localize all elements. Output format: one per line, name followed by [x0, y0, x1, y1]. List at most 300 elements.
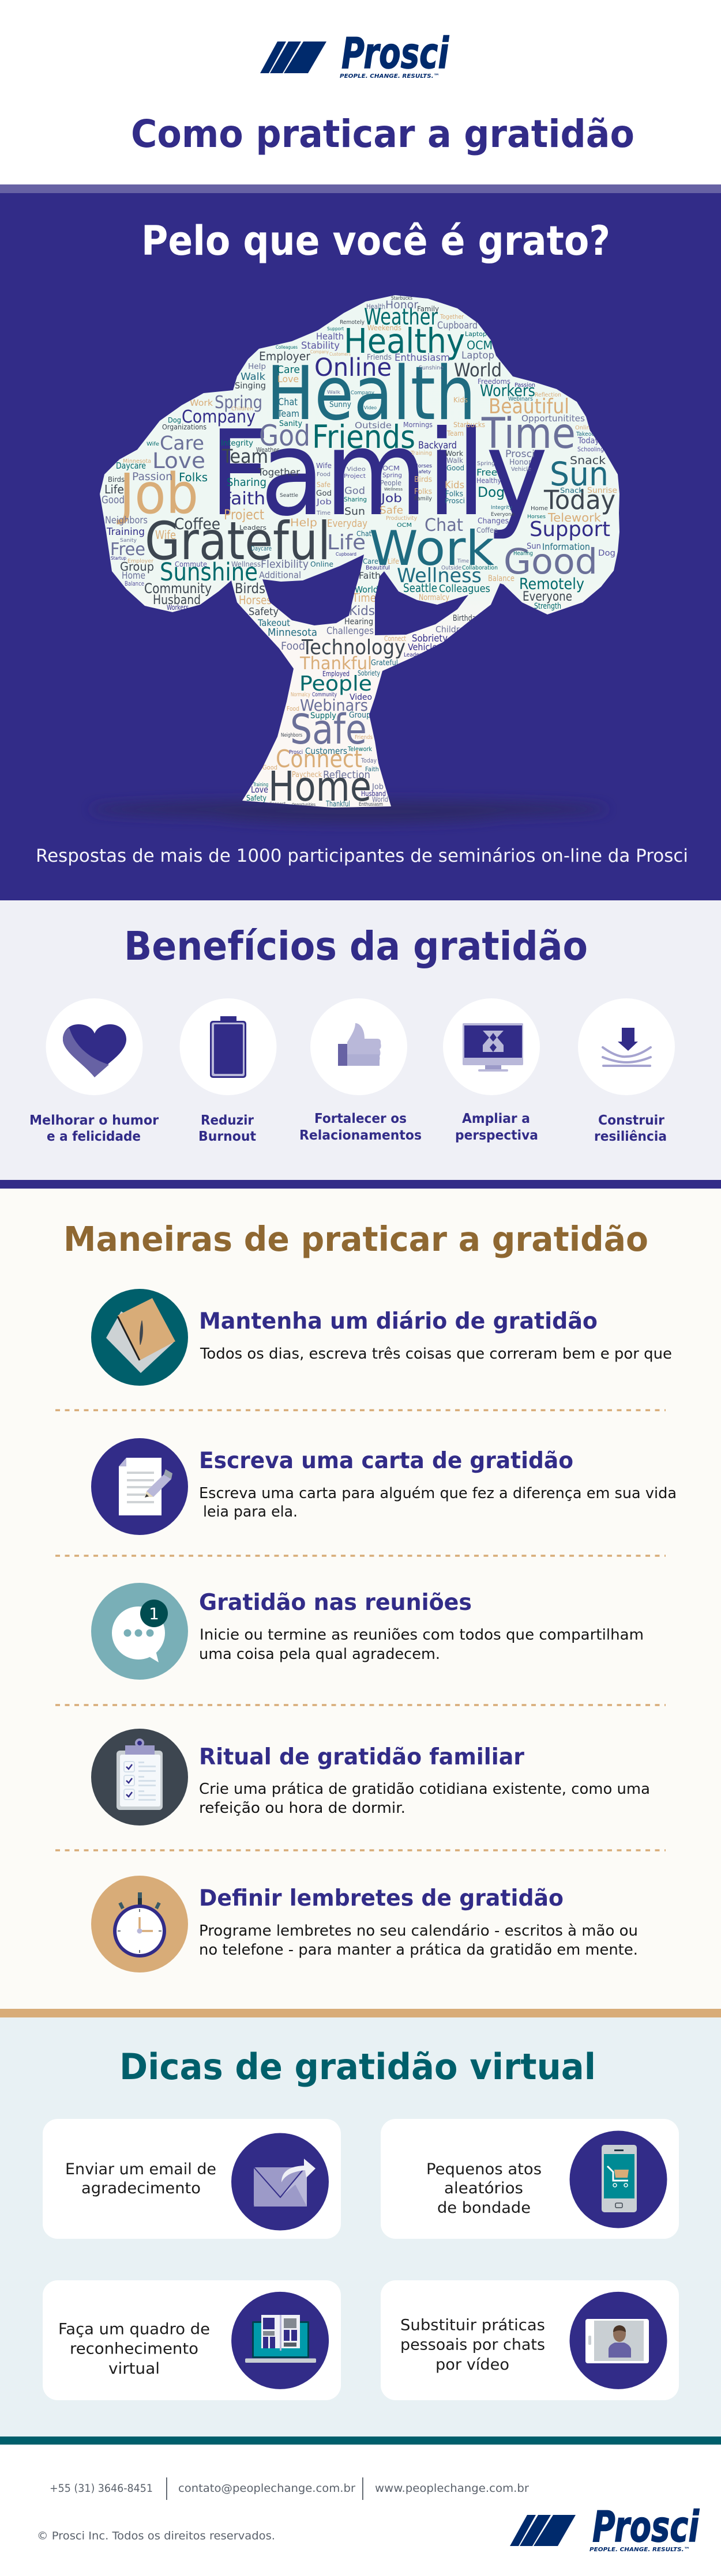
word cloud tree: Cupboard: [336, 552, 356, 557]
word cloud tree: Supply: [310, 711, 336, 721]
word cloud tree: Care: [363, 557, 378, 565]
word cloud tree: Snack: [570, 454, 606, 467]
word cloud tree: Free: [476, 467, 497, 478]
word cloud tree: Wellness: [231, 560, 261, 568]
word cloud tree: World: [355, 584, 378, 595]
word cloud tree: Flexibility: [261, 558, 309, 571]
word cloud tree: Everyone: [491, 512, 515, 518]
word cloud tree: Healthy: [476, 477, 501, 485]
word cloud tree: Leaders: [404, 652, 424, 658]
word cloud tree: Family: [417, 305, 439, 313]
word cloud tree: Sunrise: [587, 486, 617, 495]
word cloud tree: Beautiful: [366, 565, 390, 571]
item: family ritual: refeição ou hora de dormir.: [199, 1800, 405, 1817]
word cloud tree: Grateful: [371, 659, 398, 667]
word cloud tree: Neighbors: [105, 515, 148, 526]
word cloud tree: Home: [531, 506, 548, 512]
word cloud tree: Wife: [155, 528, 176, 542]
word cloud tree: Vehicle: [408, 642, 437, 653]
word cloud tree: Home: [268, 763, 371, 810]
card: recognition board: reconhecimento: [70, 2340, 198, 2358]
card: acts of kindness: de bondade: [437, 2199, 531, 2217]
benefit: relationships: Relacionamentos: [299, 1127, 422, 1143]
word cloud tree: Today: [543, 485, 615, 515]
word cloud tree: Company: [351, 390, 375, 396]
label: Ampliar a: [462, 1110, 530, 1126]
word cloud tree: Paycheck: [292, 771, 322, 779]
word cloud tree: Wife: [147, 442, 159, 447]
word cloud tree: Help: [248, 363, 266, 371]
word cloud tree: Kids: [453, 396, 468, 404]
word cloud tree: Honor: [385, 299, 418, 311]
icon: down arrow over layers: [602, 1028, 651, 1067]
title: Como praticar a gratidão: [131, 112, 634, 156]
word cloud tree: Husband: [153, 593, 201, 608]
item: letter: leia para ela.: [203, 1503, 298, 1521]
word cloud tree: Strength: [534, 602, 561, 611]
word cloud tree: Time: [352, 591, 376, 605]
word cloud tree: Honor: [509, 458, 532, 467]
word cloud tree: Birds: [414, 476, 432, 484]
word cloud tree: Weather: [256, 446, 279, 454]
footer logo: PEOPLE. CHANGE. RESULTS.™: [589, 2547, 690, 2553]
top accent bar: [0, 184, 721, 193]
word cloud tree: Team: [446, 429, 464, 437]
word cloud tree: Walk: [327, 390, 340, 395]
word cloud tree: Passion: [515, 382, 535, 389]
word cloud tree: Time: [316, 510, 331, 516]
footer contact line: +55 (31) 3646-8451: [50, 2483, 153, 2495]
word cloud tree: Changes: [478, 517, 509, 526]
word cloud tree: Everyone: [523, 590, 572, 604]
word cloud tree: Walk: [446, 457, 463, 465]
word cloud tree: Challenges: [326, 625, 374, 637]
word cloud tree: Care: [277, 364, 300, 376]
card: thank-you email: Enviar um email de: [65, 2160, 216, 2178]
word cloud tree: Outside: [441, 565, 461, 571]
word cloud tree: Reflection: [535, 392, 561, 398]
word cloud tree: Work: [445, 450, 463, 458]
word cloud tree: Stability: [301, 340, 340, 352]
word cloud tree: Good: [262, 764, 277, 771]
word cloud tree: Collaboration: [462, 565, 498, 571]
word cloud tree: Connect: [384, 635, 406, 643]
heading: Gratidão nas reuniões: [199, 1590, 472, 1616]
word cloud tree: Team: [221, 445, 268, 467]
description: Todos os dias, escreva três coisas que correram bem e por que: [200, 1345, 672, 1363]
word cloud tree: Faith: [365, 765, 379, 773]
word cloud tree: Freedoms: [478, 378, 510, 386]
word cloud tree: Today: [360, 757, 377, 764]
word cloud tree: Productivity: [386, 515, 417, 522]
word cloud tree: Online: [314, 353, 392, 382]
word cloud tree: Husband: [361, 790, 386, 798]
word cloud tree: Time: [457, 559, 469, 564]
word cloud tree: Starbucks: [391, 296, 412, 301]
word cloud tree: Customers: [305, 746, 347, 756]
word cloud tree: Connect: [269, 801, 286, 806]
word cloud tree: OCM: [397, 522, 412, 529]
word cloud tree: Life: [388, 557, 399, 565]
word cloud tree: Thankful: [299, 654, 372, 674]
description: Escreva uma carta para alguém que fez a diferença em sua vida: [199, 1485, 677, 1502]
word cloud tree: Horses: [414, 463, 432, 469]
word cloud tree: Startup: [111, 556, 126, 561]
word cloud tree: Sobriety: [412, 633, 448, 644]
word cloud tree: Good: [102, 494, 125, 506]
word cloud tree: Employed: [322, 670, 350, 678]
word cloud tree: Spring: [477, 461, 495, 467]
footer copyright: © Prosci Inc. Todos os direitos reservados.: [37, 2530, 275, 2542]
word cloud tree: Coffee: [174, 515, 220, 533]
heading: Escreva uma carta de gratidão: [199, 1448, 573, 1474]
word cloud tree: Sun: [344, 506, 365, 518]
top logo: PEOPLE. CHANGE. RESULTS.™: [340, 73, 440, 80]
benefit: resilience: resiliência: [594, 1128, 667, 1144]
word cloud tree: God: [259, 419, 310, 452]
word cloud tree: Birds: [108, 476, 125, 484]
word cloud tree: Horses: [239, 593, 272, 607]
word cloud tree: Employer: [259, 349, 311, 363]
word cloud tree: Dog: [598, 549, 615, 558]
word cloud tree: Job: [117, 462, 198, 526]
item: reminders: no telefone - para manter a prática da gratidão em mente.: [199, 1941, 638, 1959]
word cloud tree: Job: [316, 498, 332, 507]
word cloud tree: Community: [312, 692, 337, 698]
word cloud tree: Backyard: [418, 440, 457, 451]
word cloud tree: Training: [410, 450, 432, 457]
card: video chats: pessoais por chats: [400, 2336, 545, 2354]
word cloud tree: Food: [287, 705, 299, 712]
heading: Definir lembretes de gratidão: [199, 1885, 564, 1911]
item: reminders: [91, 1876, 638, 1972]
word cloud tree: Faith: [359, 570, 381, 581]
word cloud tree: Normalcy: [419, 593, 449, 602]
word cloud tree: Online: [575, 425, 594, 431]
word cloud tree: Telework: [347, 745, 373, 753]
word cloud tree: Friends: [355, 734, 373, 741]
word cloud tree: Chat: [425, 515, 463, 535]
word cloud tree: Sharing: [344, 496, 367, 503]
word cloud tree: Sobriety: [358, 669, 380, 677]
word cloud tree: Coffee: [476, 526, 498, 534]
word cloud tree: Telework: [547, 511, 601, 525]
word cloud tree: Project: [344, 473, 366, 480]
footer contact line: www.peoplechange.com.br: [375, 2483, 529, 2495]
benefit: perspective: perspectiva: [455, 1127, 538, 1143]
card: video chats: Substituir práticas: [400, 2316, 545, 2334]
word cloud tree: Connect: [276, 745, 362, 773]
word cloud tree: Seattle: [280, 493, 298, 499]
word cloud tree: Leaders: [239, 524, 266, 531]
word cloud tree: Dog: [168, 416, 181, 424]
word cloud tree: Online: [310, 560, 333, 568]
panel: benefits: [0, 900, 721, 1180]
word cloud tree: Sun: [527, 542, 541, 551]
word cloud tree: Colleagues: [439, 583, 490, 595]
word cloud tree: Dog: [478, 484, 505, 500]
item: letter: [91, 1438, 677, 1535]
word cloud tree: Neighbors: [281, 733, 302, 738]
word cloud tree: Sunshine: [419, 365, 444, 371]
word cloud tree: Good: [446, 464, 464, 472]
word cloud tree: Friends: [367, 353, 392, 362]
word cloud tree: Webinars: [300, 696, 368, 715]
description: Inicie ou termine as reuniões com todos que compartilham: [200, 1627, 644, 1644]
word cloud tree: Balance: [488, 574, 515, 583]
word cloud tree: Company: [182, 407, 256, 427]
icon: chat bubble: 1: [149, 1604, 159, 1623]
word cloud tree: Friends: [312, 418, 415, 455]
benefit: burnout: Burnout: [198, 1128, 256, 1144]
word cloud tree: Opportunitites: [521, 413, 585, 424]
word cloud tree: Company: [310, 349, 329, 354]
panel: virtual tips: [0, 2017, 721, 2437]
word cloud tree: Mornings: [403, 421, 433, 429]
word cloud tree: Information: [542, 541, 590, 552]
benefit: mood: [29, 998, 159, 1144]
word cloud tree: Team: [277, 408, 299, 419]
word cloud tree: Health: [316, 331, 344, 342]
word cloud tree: Help: [290, 516, 317, 529]
footer contact line: [50, 2477, 529, 2500]
word cloud tree: Group: [120, 560, 154, 574]
word cloud tree: Remotely: [519, 575, 584, 593]
label: Melhorar o humor: [29, 1112, 159, 1128]
label: Construir: [598, 1112, 664, 1128]
word cloud tree: Employer: [127, 559, 153, 564]
word cloud tree: Minnesota: [268, 627, 317, 639]
footer logo: [510, 2502, 700, 2553]
label: Reduzir: [201, 1112, 254, 1128]
word cloud tree: Home: [122, 570, 145, 582]
word cloud tree: Beautiful: [489, 395, 569, 418]
word cloud tree: OCM: [382, 465, 400, 472]
word cloud tree: Community: [144, 580, 212, 597]
word cloud tree: Training: [253, 782, 268, 788]
word cloud tree: Care: [160, 432, 204, 454]
benefit: burnout: [180, 998, 277, 1144]
word cloud tree: Work: [190, 398, 213, 408]
word cloud tree: Hearing: [513, 550, 533, 557]
word cloud tree: Time: [481, 409, 576, 458]
word cloud tree: Birthday: [453, 614, 480, 623]
word cloud tree: Integrity: [491, 505, 513, 511]
panel: ways to practice: [0, 1189, 721, 2009]
word cloud tree: Spring: [215, 393, 262, 413]
hero caption: Respostas de mais de 1000 participantes de seminários on-line da Prosci: [36, 846, 688, 866]
word cloud tree: Workers: [480, 381, 535, 400]
word cloud tree: [92, 288, 629, 813]
word cloud tree: Sanity: [120, 538, 137, 544]
word cloud tree: Singing: [235, 380, 266, 391]
word cloud tree: Safe: [317, 481, 331, 489]
panel: word cloud hero: [0, 193, 721, 900]
word cloud tree: Love: [152, 448, 205, 473]
word cloud tree: Wellness: [384, 487, 403, 492]
word cloud tree: Folks: [179, 470, 208, 484]
word cloud tree: Passion: [132, 470, 172, 483]
word cloud tree: Sunshine: [160, 558, 258, 587]
word cloud tree: Health: [366, 303, 385, 311]
icon: envelope: [231, 2133, 329, 2231]
word cloud tree: Daycare: [251, 545, 272, 552]
word cloud tree: Together: [257, 467, 300, 478]
word cloud tree: Faith: [222, 489, 265, 509]
word cloud tree: Starbucks: [453, 421, 485, 429]
word cloud tree: People: [380, 479, 401, 487]
word cloud tree: Kids: [445, 480, 464, 491]
word cloud tree: Project: [224, 507, 264, 523]
word cloud tree: Children: [435, 624, 470, 635]
word cloud tree: Weather: [364, 304, 438, 330]
word cloud tree: Family: [209, 406, 548, 542]
word cloud tree: Support: [530, 518, 610, 541]
word cloud tree: Balance: [125, 580, 144, 587]
word cloud tree: Life: [327, 531, 366, 555]
word cloud tree: Job: [380, 491, 402, 505]
benefit: resilience: [578, 998, 675, 1144]
icon: letter and pencil: [91, 1438, 188, 1535]
word cloud tree: Integrity: [221, 439, 253, 448]
icon: laptop with board: [231, 2292, 329, 2389]
top logo: Prosci: [341, 29, 449, 78]
card: recognition board: [43, 2280, 341, 2400]
card: recognition board: virtual: [108, 2360, 160, 2378]
word cloud tree: Snack: [560, 486, 583, 495]
word cloud tree: Prosci: [445, 497, 465, 505]
word cloud tree: Colleagues: [276, 345, 298, 350]
card: acts of kindness: aleatórios: [444, 2179, 523, 2197]
word cloud tree: Organizations: [162, 423, 206, 431]
word cloud tree: Reflection: [323, 769, 370, 781]
card: recognition board: Faça um quadro de: [58, 2321, 210, 2338]
word cloud tree: Love: [277, 374, 299, 384]
icon: thumbs up: [338, 1023, 381, 1066]
word cloud tree: Thankful: [325, 800, 350, 809]
word cloud tree: Prosci: [289, 749, 303, 756]
icon: phone with cart: [570, 2130, 667, 2228]
word cloud tree: Health: [266, 351, 476, 437]
word cloud tree: Job: [371, 783, 384, 791]
word cloud tree: Takeout: [576, 431, 597, 437]
word cloud tree: Chat: [278, 397, 298, 408]
icon: heart: [63, 1024, 126, 1077]
word cloud tree: Sanity: [279, 420, 302, 428]
word cloud tree: Hearing: [344, 617, 373, 627]
hero heading: Pelo que você é grato?: [141, 217, 610, 265]
word cloud tree: Daycare: [116, 461, 146, 471]
card: acts of kindness: [381, 2119, 679, 2239]
item: meetings: uma coisa pela qual agradecem.: [199, 1646, 440, 1663]
word cloud tree: Safety: [415, 469, 431, 474]
word cloud tree: Wife: [316, 462, 332, 470]
word cloud tree: Workers: [167, 604, 189, 612]
tips heading: Dicas de gratidão virtual: [119, 2046, 596, 2088]
benefit: relationships: [299, 998, 422, 1143]
icon: chat bubble: [91, 1583, 188, 1680]
benefits heading: Benefícios da gratidão: [124, 923, 588, 970]
word cloud tree: Life: [104, 482, 124, 496]
word cloud tree: Laptop: [465, 330, 487, 338]
word cloud tree: Minnesota: [123, 458, 151, 465]
label: Fortalecer os: [314, 1110, 407, 1126]
word cloud tree: Safety: [246, 794, 266, 803]
heading: Ritual de gratidão familiar: [199, 1744, 525, 1770]
card: thank-you email: [43, 2119, 341, 2239]
word cloud tree: Technology: [301, 636, 405, 659]
icon: battery: [210, 1016, 246, 1078]
word cloud tree: Training: [106, 526, 145, 538]
word cloud tree: Food: [317, 472, 331, 478]
word cloud tree: Customers: [329, 352, 351, 357]
word cloud tree: Folks: [445, 490, 463, 499]
word cloud tree: Group: [349, 711, 371, 720]
word cloud tree: Normalcy: [291, 692, 310, 698]
word cloud tree: Sharing: [227, 476, 266, 489]
footer contact line: contato@peoplechange.com.br: [178, 2483, 355, 2495]
word cloud tree: Love: [251, 785, 268, 795]
icon: notebook: [91, 1289, 188, 1386]
card: acts of kindness: Pequenos atos: [426, 2160, 542, 2178]
ways heading: Maneiras de praticar a gratidão: [63, 1219, 648, 1259]
word cloud tree: People: [299, 672, 372, 696]
word cloud tree: Birds: [235, 580, 265, 597]
word cloud tree: World: [454, 359, 502, 381]
top logo: [260, 29, 449, 80]
word cloud tree: Family: [414, 496, 432, 502]
word cloud tree: Free: [110, 540, 145, 560]
word cloud tree: Webinars: [508, 396, 533, 402]
word cloud tree: Spring: [382, 472, 402, 479]
word cloud tree: Additional: [259, 569, 301, 580]
word cloud tree: World: [372, 795, 388, 804]
word cloud tree: Sun: [550, 455, 609, 493]
word cloud tree: Sunny: [329, 401, 351, 409]
benefit: perspective: [443, 998, 540, 1143]
icon: monitor: [463, 1023, 523, 1072]
word cloud tree: Wellness: [397, 564, 482, 587]
word cloud tree: Remotely: [340, 319, 365, 326]
description: Programe lembretes no seu calendário - escritos à mão ou: [199, 1922, 638, 1940]
tree shadow: [89, 801, 609, 823]
benefit: mood: e a felicidade: [47, 1128, 141, 1144]
word cloud tree: Cupboard: [437, 320, 478, 331]
word cloud tree: Food: [281, 640, 305, 653]
word cloud tree: God: [344, 485, 365, 497]
word cloud tree: Kids: [349, 604, 375, 618]
word cloud tree: Work: [369, 521, 494, 576]
word cloud tree: Prosci: [505, 448, 535, 460]
word cloud tree: Folks: [414, 488, 432, 496]
card: video chats: [381, 2280, 679, 2400]
word cloud tree: Video: [347, 466, 366, 473]
word cloud tree: Walk: [241, 371, 265, 383]
word cloud tree: Chat: [356, 530, 371, 538]
word cloud tree: Safe: [380, 504, 403, 516]
word cloud tree: Together: [440, 313, 464, 320]
word cloud tree: Enthusiasm: [359, 802, 383, 808]
word cloud tree: Seattle: [403, 581, 437, 595]
word cloud tree: Outside: [355, 420, 392, 431]
card: video chats: por vídeo: [435, 2356, 509, 2374]
word cloud tree: Video: [364, 405, 377, 410]
card: thank-you email: agradecimento: [81, 2179, 201, 2197]
word cloud tree: Safe: [290, 706, 367, 753]
word cloud tree: Schooling: [577, 446, 604, 453]
description: Crie uma prática de gratidão cotidiana existente, como uma: [199, 1781, 650, 1798]
word cloud tree: Laptop: [461, 350, 494, 361]
